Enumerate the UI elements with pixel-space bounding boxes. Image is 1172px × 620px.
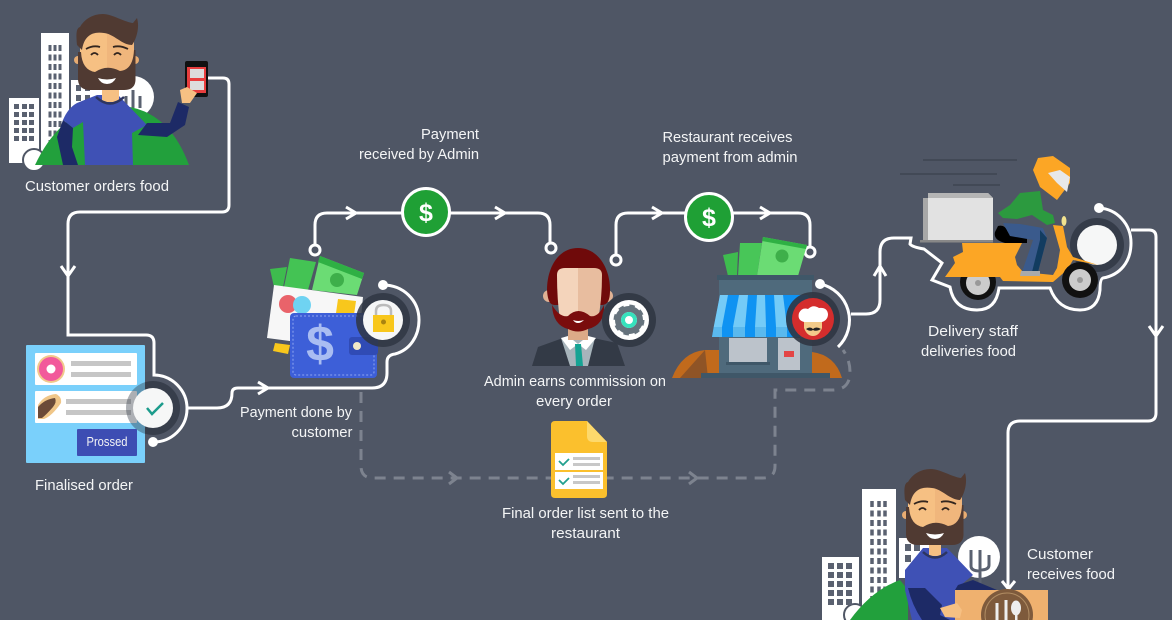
dollar badge: restaurant payment: $: [702, 204, 716, 232]
illustration: restaurant: [672, 237, 842, 378]
flow line: payment received by admin: [310, 207, 556, 255]
label: payment done by customer: Payment done by: [240, 405, 353, 421]
label: payment received by admin: Payment: [421, 127, 479, 143]
shirt: [905, 548, 973, 620]
awning: [712, 295, 815, 337]
right arm: [138, 102, 189, 137]
green hill: [850, 580, 908, 620]
label: customer orders food: Customer orders food: [25, 179, 169, 195]
neck: [102, 84, 119, 102]
label: delivery staff: Delivery staff: [928, 324, 1019, 340]
label: restaurant receives payment: Restaurant receives: [662, 130, 792, 146]
left arm: [57, 120, 78, 165]
order row: pastry: [35, 391, 137, 423]
face: [557, 268, 578, 320]
hand: [180, 87, 197, 103]
illustration: admin: [532, 248, 625, 366]
hair: [547, 248, 610, 305]
head: [902, 469, 967, 545]
dollar badge: restaurant payment: [686, 194, 732, 240]
front wheel: [1062, 262, 1098, 298]
chef badge: [786, 292, 840, 346]
dashed order list path: [361, 350, 850, 484]
label: delivery staff: deliveries food: [921, 344, 1016, 360]
gear badge: [602, 293, 656, 347]
card: [267, 285, 363, 354]
label: admin earns commission: every order: [536, 394, 612, 410]
icon: order list document: [551, 421, 607, 498]
shirt: [63, 95, 147, 165]
suit: [532, 338, 625, 366]
cash: [270, 256, 364, 295]
illustration: delivery scooter: [900, 156, 1124, 300]
label: customer receives food: Customer: [1027, 547, 1093, 563]
rear wheel: [960, 264, 996, 300]
illustration: finalised order card: [26, 345, 145, 463]
illustration: customer ordering food: [9, 14, 208, 171]
hand: [940, 603, 962, 618]
right arm: [955, 580, 997, 590]
cash: [723, 237, 807, 276]
illustration: customer receives food: [822, 469, 1048, 620]
flow line: restaurant receives payment: [611, 207, 815, 265]
label: final order list: restaurant: [551, 526, 620, 542]
label: payment received by admin: received by Admin: [359, 147, 479, 163]
city buildings: [9, 33, 154, 171]
head: [74, 14, 139, 90]
left arm: [908, 588, 950, 620]
neck: [929, 540, 941, 556]
label: restaurant receives payment: payment from admin: [662, 150, 798, 166]
flow line: customer to finalised order: [61, 78, 229, 446]
scooter body: [945, 225, 1098, 282]
label: final order list: Final order list sent to the: [502, 506, 669, 522]
flow line: finalised order to payment: [186, 282, 419, 408]
delivery badge: [1070, 218, 1124, 272]
flow line: delivery staff to customer: [1002, 230, 1163, 589]
wallet: $: [306, 316, 334, 372]
neck: [568, 322, 588, 340]
dollar badge: admin payment: $: [419, 199, 433, 227]
illustration: wallet payment: [267, 256, 378, 378]
beard: [552, 305, 604, 332]
city buildings: [822, 489, 1000, 620]
flow line: restaurant to delivery staff: [816, 204, 1131, 347]
button: prossed: Prossed: [86, 435, 128, 449]
phone: [185, 61, 208, 97]
check badge: [126, 381, 180, 435]
label: payment done by customer: customer: [292, 425, 353, 441]
food box: [955, 589, 1048, 620]
store body: [701, 275, 830, 378]
green hill: [35, 105, 189, 165]
dollar badge: admin payment: [402, 188, 450, 236]
ears: [543, 290, 555, 302]
lock badge: [356, 293, 410, 347]
rider: [995, 156, 1070, 276]
hills: [672, 350, 720, 378]
label: customer receives food: receives food: [1027, 567, 1115, 583]
speed lines: [900, 160, 1017, 185]
label: finalised order: Finalised order: [35, 478, 133, 494]
delivery box: [920, 193, 993, 242]
label: admin earns commission: Admin earns commission on: [484, 374, 666, 390]
order row: donut: [35, 353, 137, 385]
